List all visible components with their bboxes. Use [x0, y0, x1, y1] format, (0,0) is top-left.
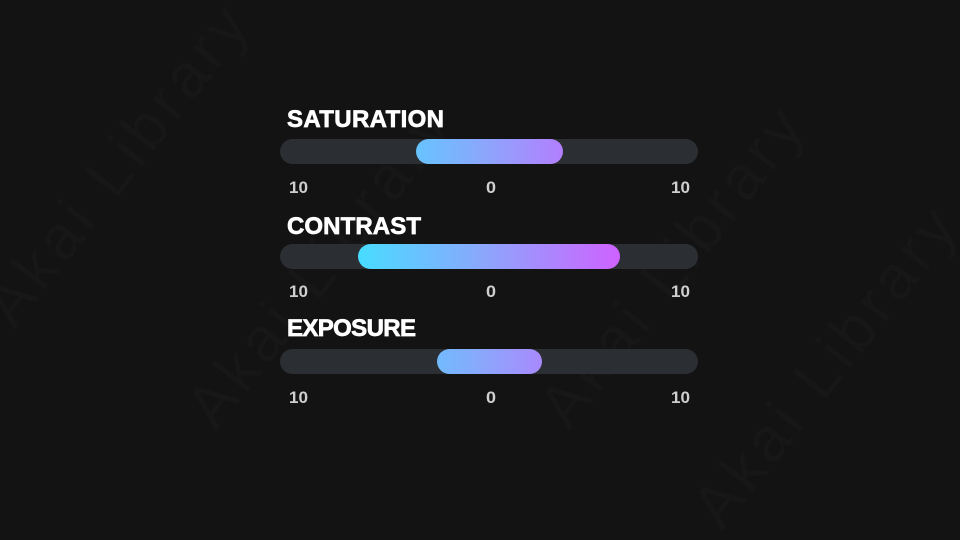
exposure scale: 10	[289, 389, 308, 407]
heading: saturation: SATURATION	[287, 106, 444, 133]
exposure scale: 10	[671, 389, 690, 407]
saturation scale: 0	[486, 179, 496, 197]
watermarks: Akai Library	[526, 95, 817, 441]
contrast scale: 10	[671, 283, 690, 301]
contrast scale	[289, 283, 690, 301]
saturation scale	[289, 179, 690, 197]
exposure scale	[289, 389, 690, 407]
saturation scale: 10	[671, 179, 690, 197]
heading: contrast: CONTRAST	[287, 213, 421, 240]
contrast fill	[358, 244, 620, 269]
heading: exposure: EXPOSURE	[287, 315, 416, 342]
contrast track	[280, 244, 698, 269]
panel: contrast slider	[280, 213, 698, 301]
panel: exposure slider	[280, 315, 698, 407]
panel: saturation slider	[280, 106, 698, 197]
saturation track	[280, 139, 698, 164]
contrast scale: 0	[486, 283, 496, 301]
exposure fill	[437, 349, 542, 374]
contrast scale: 10	[289, 283, 308, 301]
exposure scale: 0	[486, 389, 496, 407]
saturation fill	[416, 139, 563, 164]
saturation scale: 10	[289, 179, 308, 197]
exposure track	[280, 349, 698, 374]
watermarks: Akai Library	[173, 95, 464, 441]
